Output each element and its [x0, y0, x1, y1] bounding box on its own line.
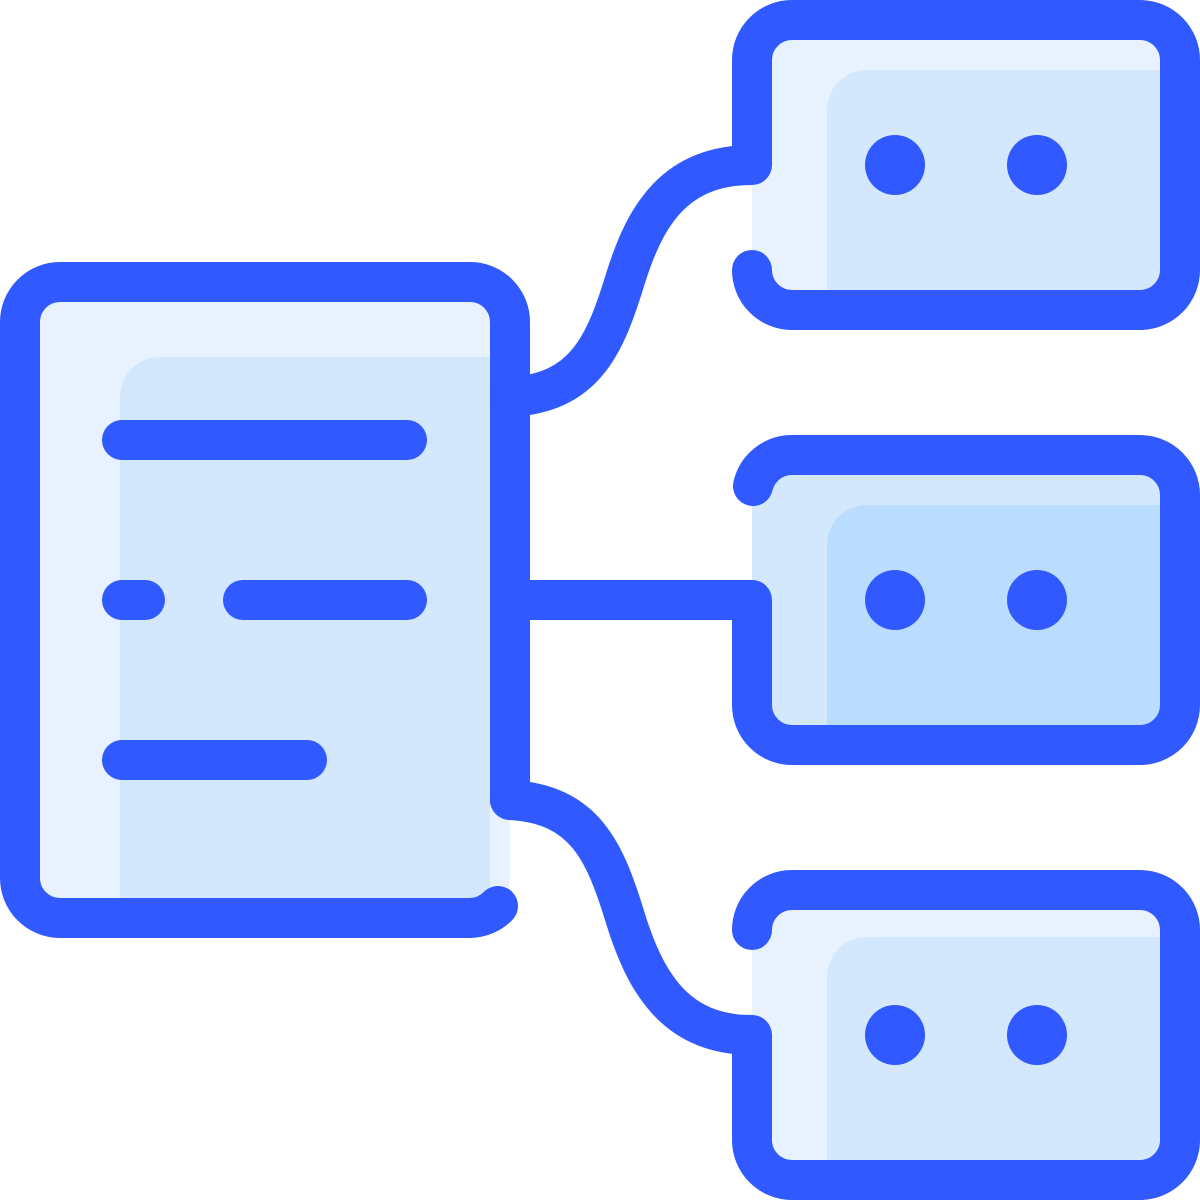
box: bottom right: [752, 890, 1180, 1180]
connector: middle line: [510, 580, 752, 620]
text lines: [122, 440, 407, 760]
connector: top curve: [510, 165, 752, 397]
box: middle right: [752, 455, 1180, 745]
box: top right: [752, 20, 1180, 310]
connector: bottom curve: [510, 800, 752, 1035]
panel: left document box: [20, 282, 510, 918]
